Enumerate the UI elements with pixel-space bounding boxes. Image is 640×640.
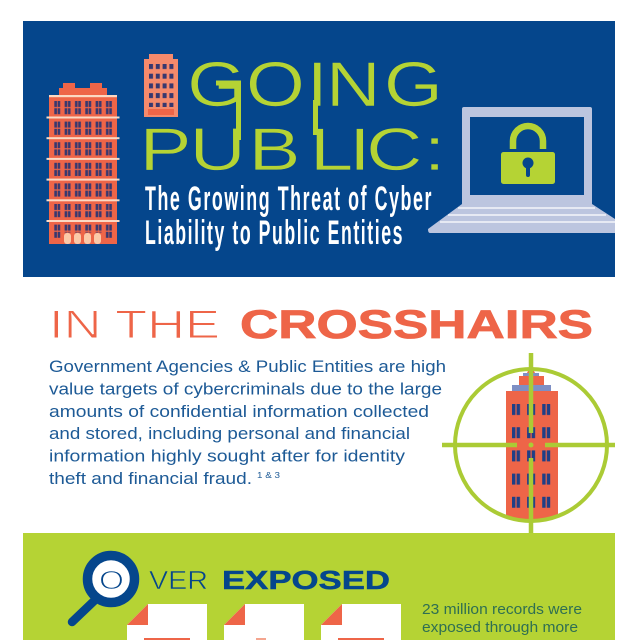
icon: magnifying glass: [72, 556, 134, 622]
text block: records exposed: exposed through more: [422, 620, 578, 636]
text block: records exposed: 23 million records were: [422, 602, 582, 618]
title: PUBLIC:: [139, 116, 445, 183]
heading: in the crosshairs: CROSSHAIRS: [240, 303, 593, 347]
text block: crosshairs description: information highly sought after for identity: [49, 446, 406, 466]
title: [139, 49, 445, 183]
heading: over exposed: EXPOSED: [222, 565, 390, 595]
icon: document three: [321, 604, 401, 640]
text block: crosshairs description: theft and financial fraud.: [49, 469, 252, 488]
heading: in the crosshairs: IN THE: [49, 303, 220, 347]
icon: laptop with padlock: [428, 107, 615, 233]
text block: crosshairs description: 1 & 3: [257, 470, 280, 480]
text block: records exposed: [422, 602, 582, 636]
text block: crosshairs description: [49, 357, 446, 488]
icon: document two: [224, 604, 304, 640]
heading: in the crosshairs: [49, 303, 593, 347]
icon: large office building: [46, 83, 120, 244]
heading: over exposed: O: [99, 565, 124, 595]
subtitle: Liability to Public Entities: [145, 214, 404, 252]
icon: document one: [127, 604, 207, 640]
icon: small office building: [144, 54, 178, 117]
heading: over exposed: VER: [149, 565, 208, 595]
panel: banner: [23, 21, 615, 277]
title: GOING: [187, 49, 443, 120]
panel: over exposed: [23, 533, 615, 640]
icon: building in crosshairs: [442, 353, 615, 535]
text block: crosshairs description: and stored, including personal and financial: [49, 424, 410, 443]
text block: crosshairs description: amounts of confidential information collected: [49, 402, 429, 421]
subtitle: [145, 180, 433, 252]
heading: over exposed: [99, 565, 390, 595]
text block: crosshairs description: value targets of cybercriminals due to the large: [49, 380, 442, 398]
icon: padlock: [501, 126, 555, 184]
text block: crosshairs description: Government Agencies & Public Entities are high: [49, 357, 446, 376]
